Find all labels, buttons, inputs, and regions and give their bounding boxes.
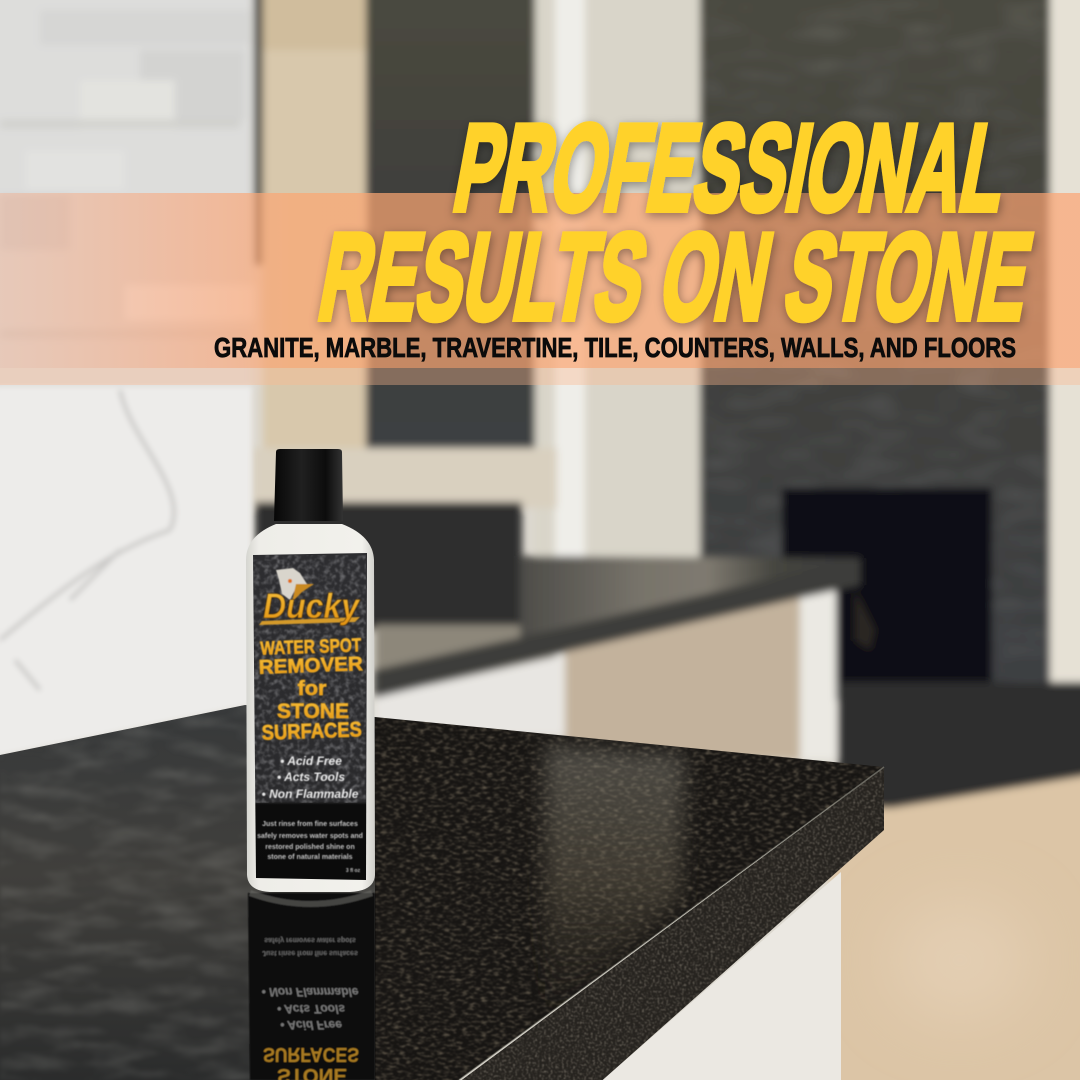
- left stone wall: [0, 0, 255, 390]
- tan cabinet: [565, 596, 800, 760]
- dark stone panel: [366, 0, 536, 448]
- label title: [258, 635, 364, 745]
- label fine print: Just rinse from fine surfaces: [262, 821, 358, 828]
- label bullets: • Acts Tools: [277, 770, 345, 784]
- cap: [274, 449, 343, 521]
- bottle body: [246, 524, 375, 892]
- logo: Ducky: [263, 587, 360, 626]
- label fine print: stone of natural materials: [267, 854, 353, 861]
- label title: REMOVER: [258, 653, 364, 679]
- logo: [259, 568, 360, 626]
- light column: [535, 0, 700, 630]
- counter right: [375, 717, 884, 1080]
- floor: [830, 770, 1080, 1080]
- label title: STONE: [277, 700, 349, 723]
- back counter edge: [374, 558, 860, 698]
- white cabinet below counter: [597, 872, 841, 1080]
- dark strip: [254, 0, 263, 265]
- label bullets: • Non Flammable: [262, 787, 359, 801]
- label bullets: [262, 754, 359, 801]
- counter left: [0, 705, 375, 1080]
- label title: WATER SPOT: [260, 635, 362, 660]
- label fine print: 3 fl oz: [346, 868, 361, 874]
- counter edge: [455, 767, 884, 1080]
- bottle reflection: safely removes water spots: [264, 936, 356, 943]
- product bottle: [246, 449, 375, 1080]
- marble panel: [0, 386, 252, 757]
- bottle reflection: [248, 893, 375, 1080]
- title: [310, 100, 1041, 346]
- bottle reflection: • Non Flammable: [262, 985, 359, 999]
- label title: SURFACES: [261, 718, 362, 745]
- granite counter: [0, 700, 890, 1080]
- hearth: [838, 682, 1080, 808]
- fireplace: [782, 488, 992, 683]
- label fine print: [257, 821, 363, 874]
- bottle reflection: • Acts Tools: [277, 1002, 345, 1016]
- orange band: [0, 193, 1080, 385]
- white lower panel: [375, 655, 565, 735]
- bottle reflection: • Acid Free: [280, 1018, 342, 1032]
- label: [253, 553, 367, 880]
- label fine print: restored polished shine on: [265, 844, 355, 851]
- white post: [800, 584, 836, 760]
- bottle reflection: Just rinse from fine surfaces: [262, 949, 358, 956]
- tan stone column: [263, 0, 366, 450]
- bottle reflection: SURFACES: [263, 1043, 359, 1065]
- shelf: [252, 448, 557, 508]
- label bullets: • Acid Free: [280, 754, 342, 768]
- label title: for: [298, 678, 327, 700]
- dark fireplace wall: [700, 0, 1050, 700]
- label fine print: safely removes water spots and: [257, 833, 363, 840]
- back counter surface: [520, 556, 860, 650]
- floor highlight: [890, 900, 1030, 1020]
